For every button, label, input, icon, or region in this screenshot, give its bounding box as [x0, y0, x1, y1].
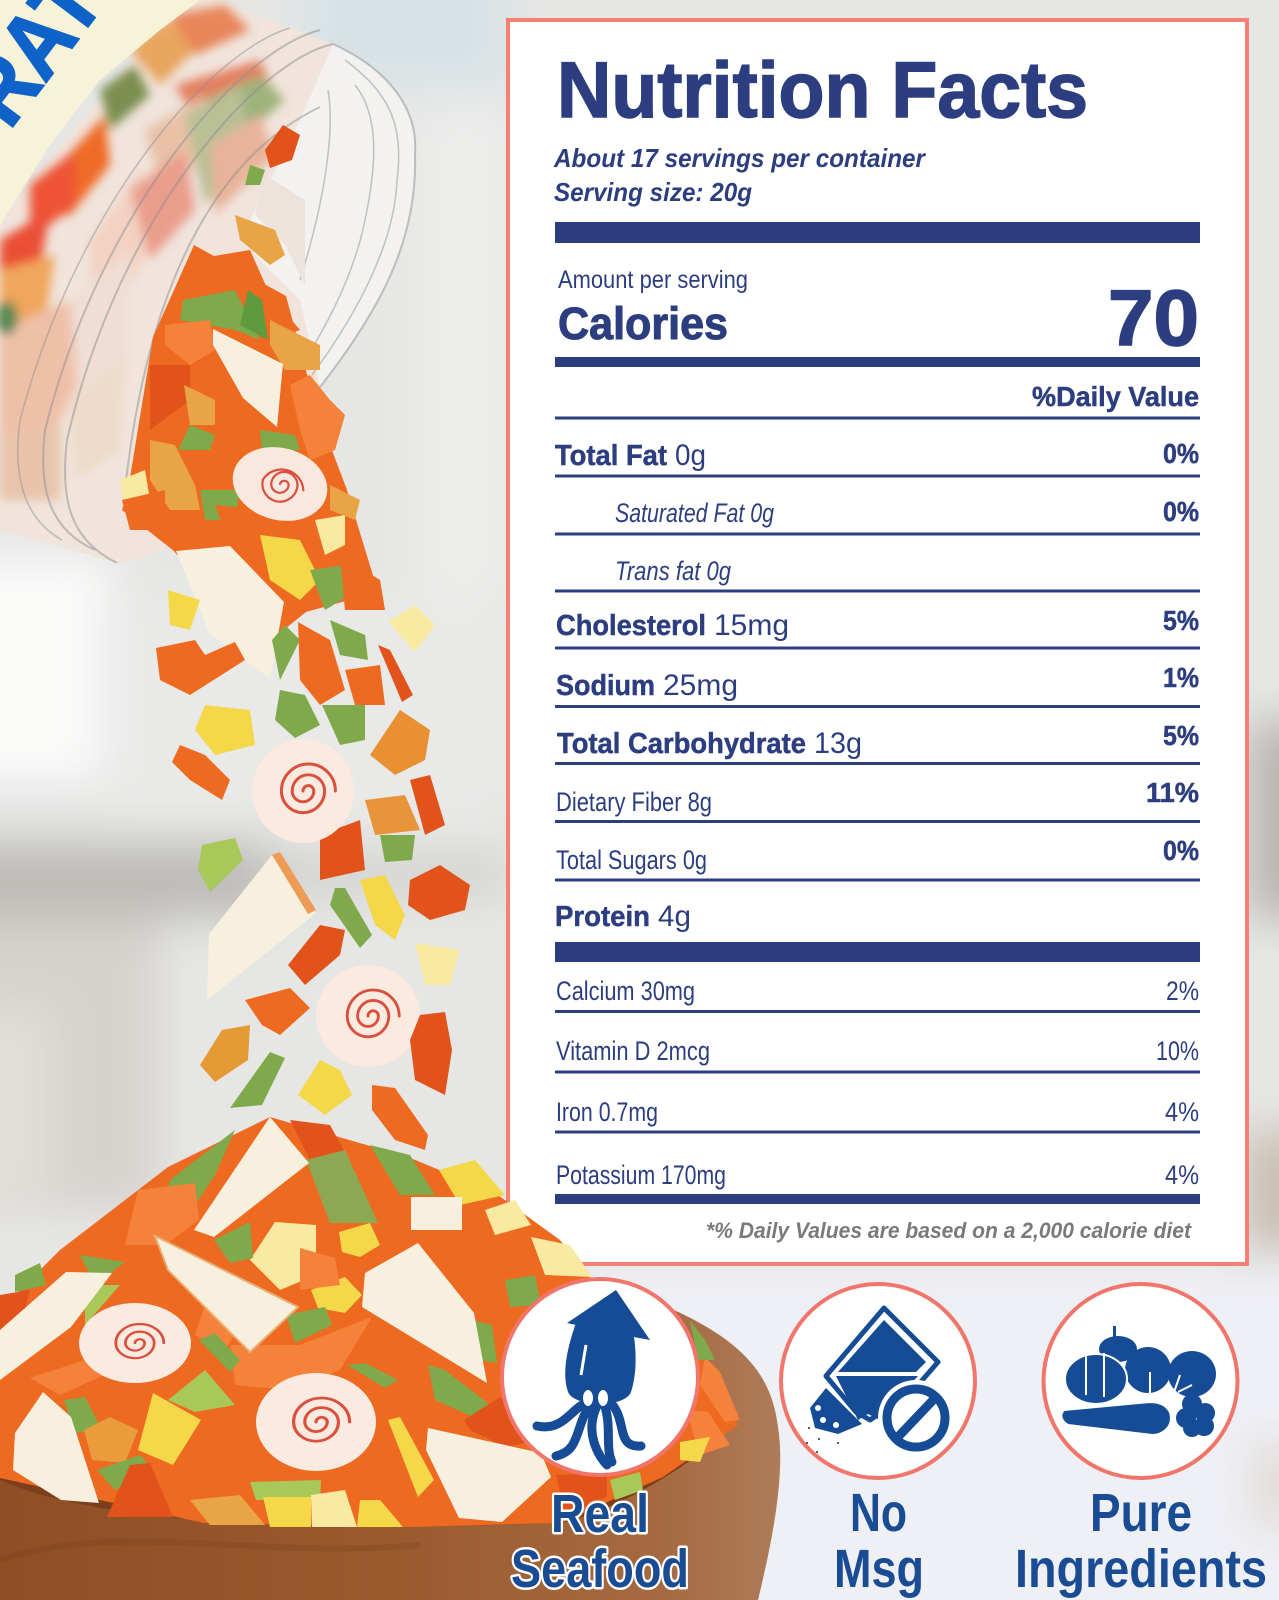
row: calcium: 2% [1166, 976, 1199, 1006]
row: calcium: Calcium 30mg [556, 976, 695, 1006]
row: dietary fiber [556, 777, 1199, 817]
fish cake swirl [79, 1303, 191, 1383]
row: saturated fat: 0% [1163, 496, 1199, 527]
row: vitamin d [556, 1036, 1199, 1066]
badge: no msg [781, 1284, 975, 1599]
row: dietary fiber: 11% [1146, 777, 1199, 808]
row: calcium [556, 976, 1199, 1006]
row: iron: 4% [1165, 1097, 1199, 1127]
row: potassium [556, 1160, 1199, 1190]
calories block: 70 [1108, 273, 1199, 362]
jar label [0, 0, 200, 225]
row: dietary fiber: Dietary Fiber 8g [556, 787, 712, 817]
serving info [553, 143, 927, 207]
label: no msg: No [850, 1483, 907, 1543]
row: saturated fat: Saturated Fat 0g [615, 498, 774, 528]
row: total fat: Total Fat [555, 440, 667, 472]
row: vitamin d: 10% [1156, 1036, 1199, 1066]
row: iron: Iron 0.7mg [556, 1097, 658, 1127]
row: sodium: Sodium [556, 670, 655, 702]
row: potassium: Potassium 170mg [556, 1160, 726, 1190]
fish cake swirl [252, 739, 354, 843]
row: cholesterol: 15mg [714, 609, 789, 642]
illustration: wooden bowl [0, 1310, 780, 1600]
fish cake swirl [256, 1373, 376, 1471]
row: saturated fat [615, 496, 1199, 528]
calories block: Calories [558, 298, 728, 349]
row: total carbohydrate: Total Carbohydrate [557, 728, 806, 760]
heading: Nutrition Facts: Nutrition Facts [557, 45, 1088, 134]
row: total sugars: Total Sugars 0g [556, 845, 707, 875]
row: iron [556, 1097, 1199, 1127]
label: no msg: Msg [834, 1539, 924, 1599]
row: sodium: 25mg [663, 669, 738, 702]
row: total carbohydrate [557, 720, 1199, 760]
illustration: tilted jar [0, 0, 415, 563]
row: total fat: 0% [1163, 438, 1199, 469]
fish cake swirl [316, 965, 420, 1067]
row: sodium [556, 662, 1199, 702]
row: total sugars: 0% [1163, 835, 1199, 866]
row: total carbohydrate: 13g [814, 727, 862, 760]
jar opening [240, 44, 415, 387]
row: total fat: 0g [675, 439, 706, 472]
row: protein: 4g [658, 900, 691, 933]
icon: vegetables [1061, 1326, 1216, 1437]
illustration: food pile in bowl [0, 1117, 740, 1527]
row: sodium: 1% [1163, 662, 1199, 693]
fish cake wedge [213, 329, 283, 427]
row: vitamin d: Vitamin D 2mcg [556, 1036, 710, 1066]
label: real seafood: Real [551, 1484, 649, 1544]
label: no msg [834, 1483, 924, 1599]
icon: squid [537, 1290, 650, 1465]
row: cholesterol [556, 605, 1199, 642]
label: pure ingredients [1015, 1483, 1267, 1599]
daily value heading: %Daily Value [1032, 381, 1199, 412]
label: real seafood [511, 1484, 689, 1599]
icon: salt shaker with prohibition sign [806, 1308, 954, 1456]
calories block [558, 266, 1199, 362]
serving info: Serving size: 20g [554, 177, 752, 207]
panel: nutrition facts label [508, 20, 1247, 1264]
footnote: *% Daily Values are based on a 2,000 calorie diet [706, 1218, 1193, 1243]
serving info: About 17 servings per container [553, 143, 927, 173]
row: potassium: 4% [1165, 1160, 1199, 1190]
calories block: Amount per serving [558, 266, 748, 294]
row: cholesterol: Cholesterol [556, 610, 706, 642]
row: total fat [555, 438, 1199, 472]
row: protein: Protein [555, 901, 650, 933]
badge: pure ingredients [1015, 1284, 1267, 1599]
row: total carbohydrate: 5% [1163, 720, 1199, 751]
badge: real seafood [502, 1279, 698, 1599]
row: cholesterol: 5% [1163, 605, 1199, 636]
label: real seafood: Seafood [511, 1539, 689, 1599]
illustration: food spilling from the jar [120, 125, 470, 1150]
label: pure ingredients: Pure [1090, 1483, 1192, 1543]
row: total sugars [556, 835, 1199, 875]
row: trans fat: Trans fat 0g [615, 556, 731, 586]
fish cake swirl [224, 437, 336, 531]
